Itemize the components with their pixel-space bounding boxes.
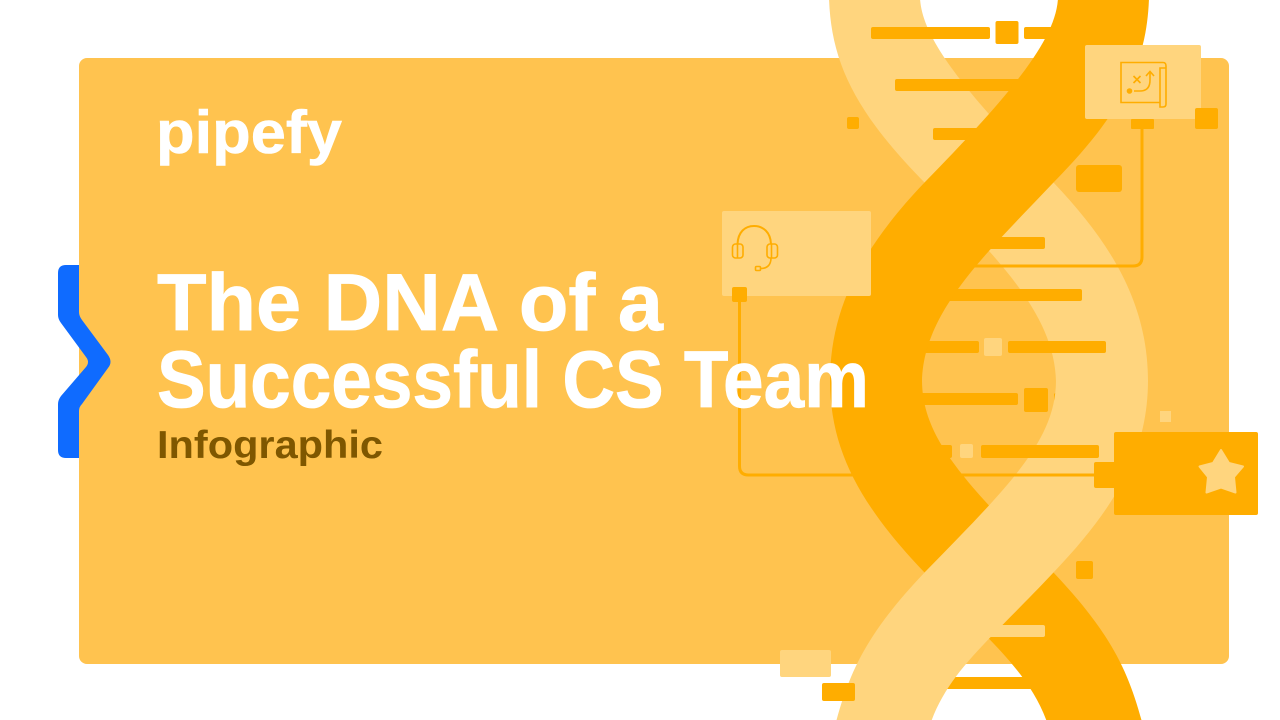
connector square under headset card [732, 287, 747, 302]
panel: yellow background [79, 58, 1229, 664]
title: The DNA of a [157, 258, 664, 348]
floating squares [780, 117, 1171, 701]
logo: pipefy wordmark: pipefy [156, 99, 343, 166]
DNA rungs: upper bars [871, 21, 1112, 412]
DNA strand: lower dark section [830, 380, 1142, 720]
connector line: headset card to star card [740, 300, 1095, 475]
card: map strategy [1085, 45, 1201, 119]
icon: blue chevron tab [58, 265, 110, 458]
subtitle: Infographic [157, 424, 383, 467]
connector line: map card to strand [950, 126, 1142, 266]
connector tab under map card [1131, 119, 1154, 129]
icon: headset [732, 226, 778, 270]
title: Successful CS Team [157, 335, 869, 425]
card: star [1094, 432, 1258, 515]
icon: strategy map [1121, 62, 1166, 107]
DNA strand: lower light section [836, 380, 1148, 720]
DNA strand: upper dark section [830, 0, 1149, 382]
card: headset support [722, 211, 871, 296]
icon: star [1200, 450, 1243, 492]
DNA rung: light bar on dark strand [985, 625, 1045, 637]
DNA rungs: lower bars [925, 444, 1099, 458]
light square on rung [984, 338, 1002, 356]
square at map card corner [1195, 108, 1218, 129]
title [157, 258, 869, 425]
DNA strand: upper light section [829, 0, 1148, 382]
DNA rung: bottom dark bar [940, 677, 1035, 689]
